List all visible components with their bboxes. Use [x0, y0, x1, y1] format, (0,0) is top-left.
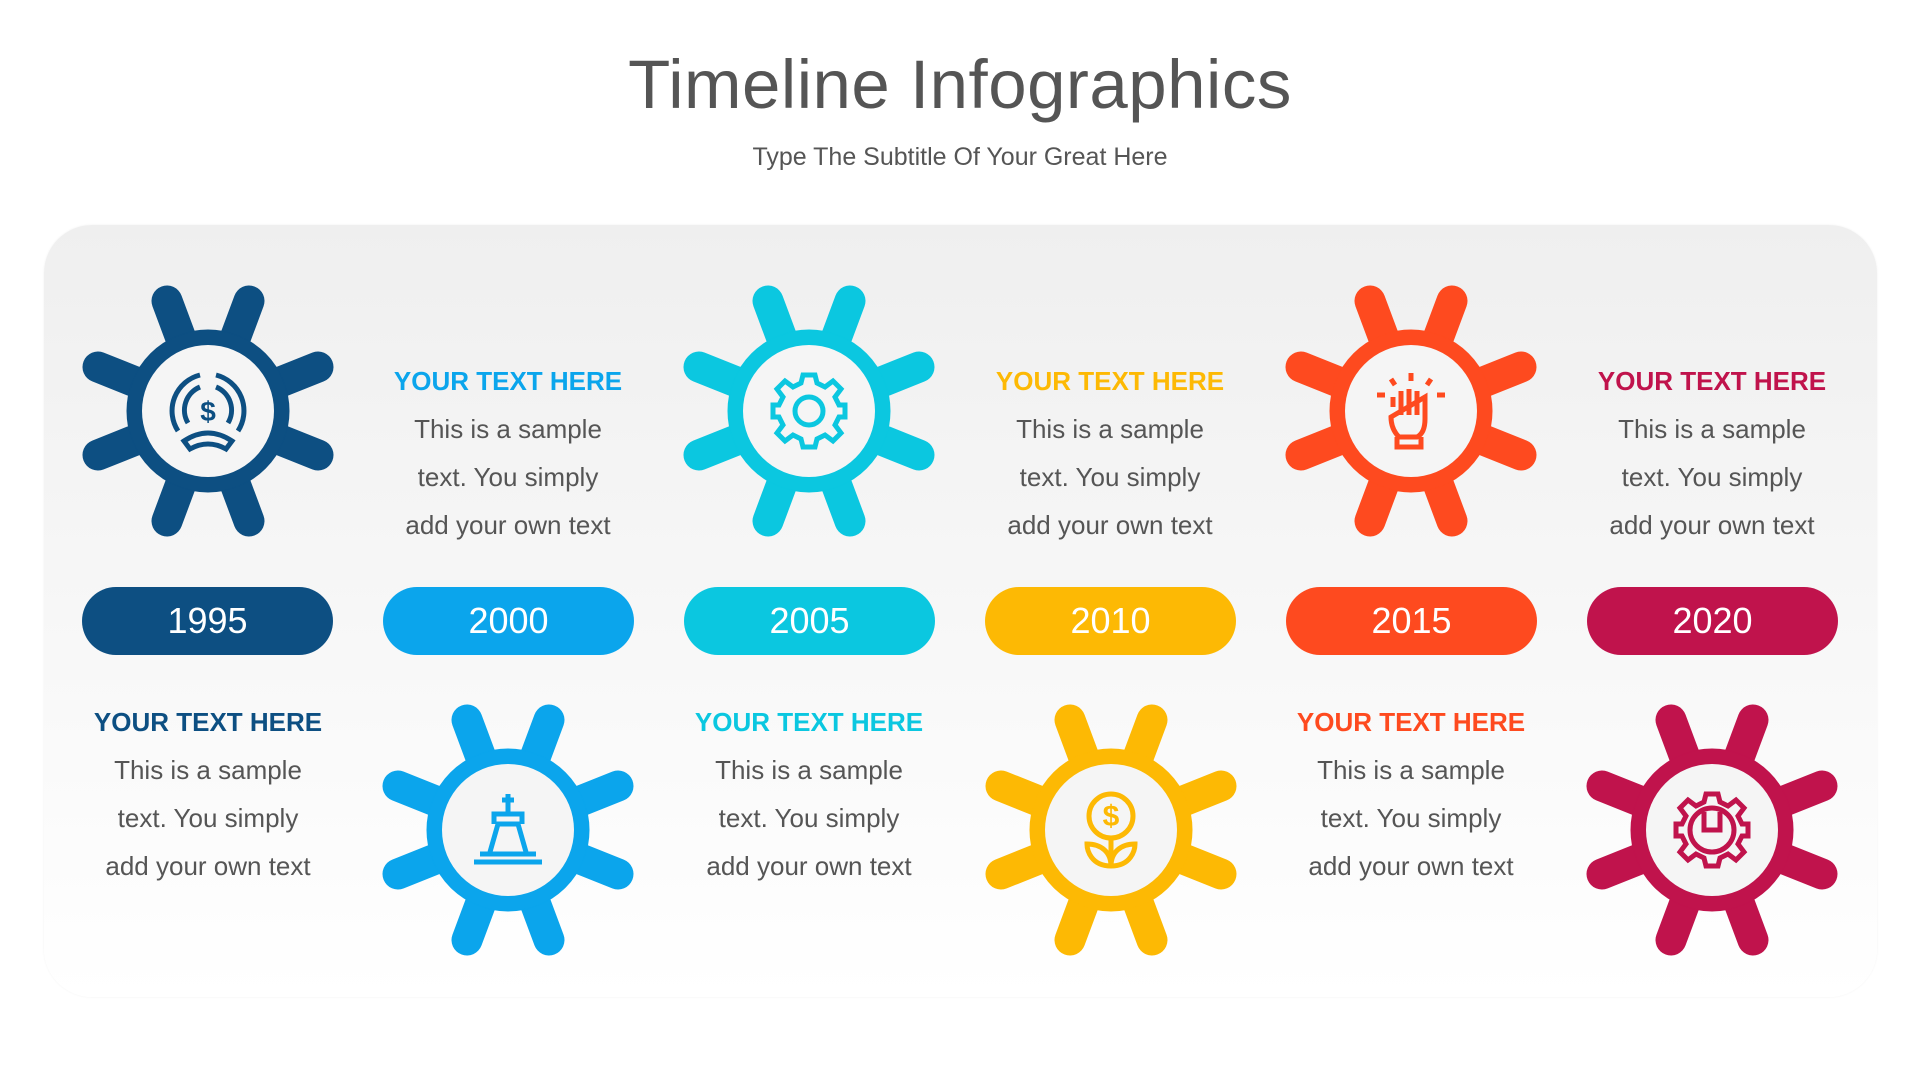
icon: gear 1995 [82, 286, 334, 536]
text block: 2005: YOUR TEXT HERE [695, 707, 923, 737]
pill: 2020 [1587, 587, 1838, 655]
text block: 2000: YOUR TEXT HERE [394, 366, 622, 396]
text block: 1995: This is a sample [114, 755, 302, 785]
icon: gear 2020 [1586, 704, 1838, 956]
icon: gear 2010 [986, 704, 1236, 956]
panel: timeline background [44, 225, 1877, 997]
icon: gear 1995: $ [200, 396, 216, 427]
text block: 2000: This is a sample [414, 414, 602, 444]
icon: gear 2000 [382, 704, 634, 956]
text block: 2005: This is a sample [715, 755, 903, 785]
pill: 2010 [985, 587, 1236, 655]
text block: 2020: YOUR TEXT HERE [1598, 366, 1826, 396]
text block: 2005: text. You simply [719, 803, 899, 833]
text block: 2015: add your own text [1308, 851, 1514, 881]
icon: gear 2015 [1286, 286, 1536, 536]
text block: 2020: text. You simply [1622, 462, 1802, 492]
pill: 1995: 1995 [167, 600, 248, 641]
text block: 2020: add your own text [1609, 510, 1815, 540]
text block: 1995: text. You simply [118, 803, 298, 833]
pill: 2015 [1286, 587, 1537, 655]
icon: gear 2005 [684, 286, 934, 536]
text block: 2000: text. You simply [418, 462, 598, 492]
text block: 1995: add your own text [105, 851, 311, 881]
text block: 1995: YOUR TEXT HERE [94, 707, 322, 737]
text block: 2010 [996, 366, 1224, 540]
text block: 2020 [1598, 366, 1826, 540]
subtitle: Type The Subtitle Of Your Great Here [752, 143, 1168, 171]
pill: 1995 [82, 587, 333, 655]
pill: 2005: 2005 [769, 600, 850, 641]
pill: 2010: 2010 [1070, 600, 1151, 641]
text block: 2010: add your own text [1007, 510, 1213, 540]
text block: 2010: text. You simply [1020, 462, 1200, 492]
text block: 1995 [94, 707, 322, 881]
text block: 2005 [695, 707, 923, 881]
text block: 2015: YOUR TEXT HERE [1297, 707, 1525, 737]
pill: 2000 [383, 587, 634, 655]
icon: gear 2010: $ [1103, 800, 1120, 833]
text block: 2015: This is a sample [1317, 755, 1505, 785]
text block: 2015: text. You simply [1321, 803, 1501, 833]
pill: 2020: 2020 [1672, 600, 1753, 641]
text block: 2015 [1297, 707, 1525, 881]
text block: 2020: This is a sample [1618, 414, 1806, 444]
pill: 2015: 2015 [1371, 600, 1452, 641]
pill: 2005 [684, 587, 935, 655]
text block: 2000: add your own text [405, 510, 611, 540]
pill: 2000: 2000 [468, 600, 549, 641]
text block: 2010: YOUR TEXT HERE [996, 366, 1224, 396]
text block: 2005: add your own text [706, 851, 912, 881]
text block: 2010: This is a sample [1016, 414, 1204, 444]
text block: 2000 [394, 366, 622, 540]
title: Timeline Infographics [628, 46, 1292, 123]
